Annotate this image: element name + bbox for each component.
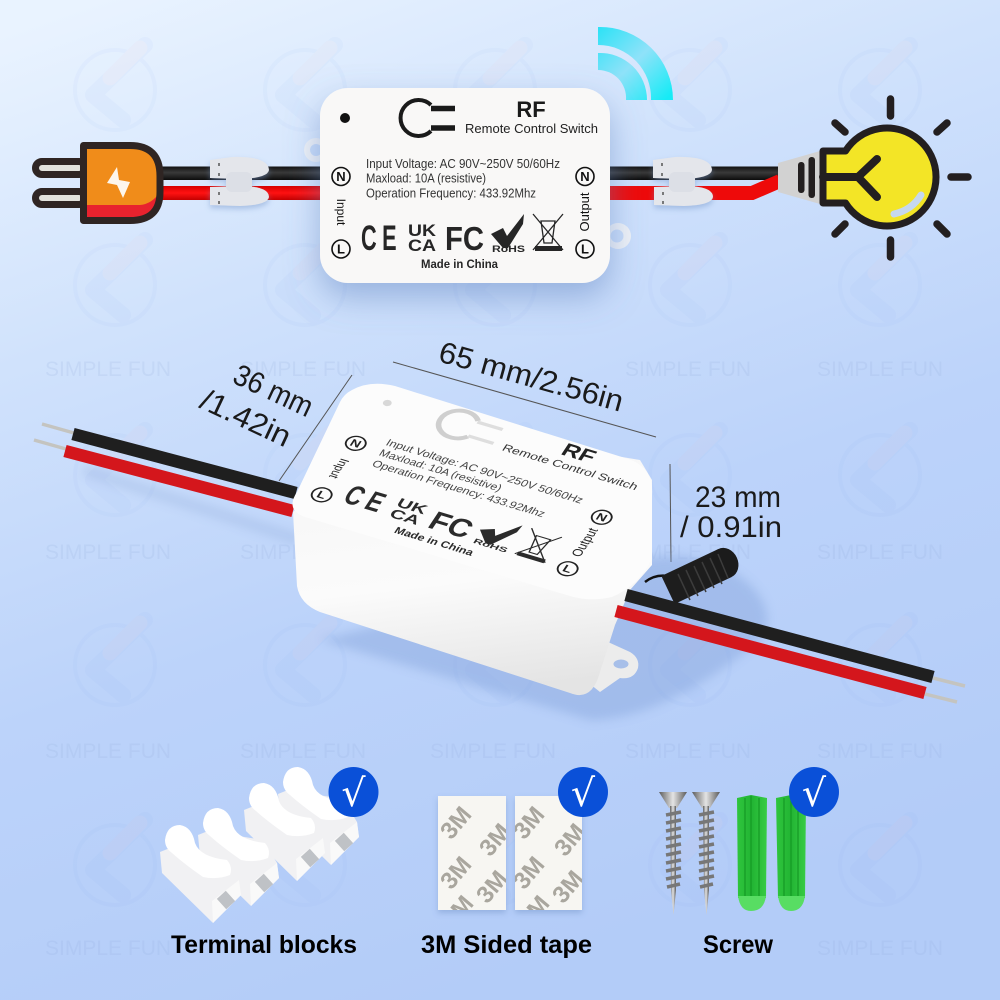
block 3 <box>244 783 325 881</box>
watermark pattern: SIMPLE FUN <box>817 937 943 960</box>
watermark pattern: SIMPLE FUN <box>240 358 366 381</box>
certification marks <box>361 214 563 271</box>
caption: screw: Screw <box>703 931 774 959</box>
block 1 <box>160 825 241 923</box>
dimension line: depth <box>279 375 352 481</box>
green wall anchor 2 <box>776 795 806 911</box>
watermark pattern: SIMPLE FUN <box>45 740 171 763</box>
specifications: Operation Frequency: 433.92Mhz <box>366 186 536 200</box>
specifications: Input Voltage: AC 90V~250V 50/60Hz <box>366 157 560 171</box>
specifications: Maxload: 10A (resistive) <box>366 172 486 186</box>
mounting lugs <box>304 138 631 249</box>
dimension label: 23 mm: / 0.91in <box>680 511 782 544</box>
check badge: screws: √ <box>802 771 827 815</box>
dimension label: 36 mm: /1.42in <box>195 383 296 454</box>
subheading: Remote Control Switch <box>500 442 641 493</box>
watermark pattern: SIMPLE FUN <box>45 358 171 381</box>
tape strip 1: 3M <box>474 819 516 862</box>
terminal marks: L <box>581 242 589 256</box>
terminal marks <box>308 434 615 578</box>
output wires <box>616 595 965 702</box>
icon: plug <box>36 146 160 220</box>
specifications: Operation Frequency: 433.92Mhz <box>370 458 548 520</box>
tape strip 2: 3M <box>508 852 550 895</box>
terminal marks: L <box>314 489 329 502</box>
certification marks: FC <box>423 506 480 544</box>
terminal marks: Input <box>325 457 351 480</box>
left dimension wires <box>34 424 300 540</box>
dimension label: 36 mm: 36 mm <box>228 358 318 424</box>
watermark pattern: SIMPLE FUN <box>817 358 943 381</box>
accessory: terminal blocks <box>160 767 359 923</box>
certification marks <box>331 476 562 578</box>
caption: terminal blocks: Terminal blocks <box>171 931 357 959</box>
terminal marks: N <box>336 169 346 184</box>
caption: tape: 3M Sided tape <box>421 931 592 959</box>
tape strip 2: 3M <box>508 802 550 845</box>
block 4 <box>278 767 359 865</box>
tape strip 2: 3M <box>513 891 555 934</box>
watermark pattern: SIMPLE FUN <box>45 937 171 960</box>
terminal marks: Output <box>577 192 592 232</box>
specifications: Input Voltage: AC 90V~250V 50/60Hz <box>383 437 586 506</box>
printed label <box>302 384 653 588</box>
certification marks: CE <box>361 220 397 258</box>
tape strip 1: 3M <box>435 852 477 895</box>
certification marks: CA <box>386 507 423 528</box>
heading: RF: RF <box>516 97 546 122</box>
watermark pattern: SIMPLE FUN <box>817 740 943 763</box>
tape strip 1: 3M <box>435 802 477 845</box>
heading: RF: RF <box>557 439 601 467</box>
specifications <box>366 157 560 200</box>
certification marks: UK <box>408 222 436 240</box>
antenna coil <box>645 543 743 600</box>
watermark pattern: SIMPLE FUN <box>45 541 171 564</box>
front and side faces <box>293 420 652 695</box>
dimension line: width <box>393 362 656 437</box>
tape strip 2 <box>513 796 584 915</box>
certification marks: UK <box>393 496 431 518</box>
3D switch module <box>292 384 965 720</box>
check badge: terminal blocks <box>328 767 378 817</box>
screw 2 <box>692 792 720 915</box>
accessory: 3M tape <box>436 796 584 915</box>
watermark pattern: SIMPLE FUN <box>240 740 366 763</box>
certification marks: Made in China <box>392 526 476 558</box>
module body <box>320 88 610 283</box>
dimension label: 65 mm: 65 mm/2.56in <box>435 336 627 419</box>
check badge: terminal blocks: √ <box>341 771 366 815</box>
wiring diagram <box>36 27 968 283</box>
right wire connector <box>653 157 713 206</box>
mounting lug <box>585 642 638 692</box>
terminal marks: N <box>593 511 610 524</box>
dimension line: height <box>670 464 671 562</box>
terminal marks <box>332 168 594 258</box>
terminal marks: L <box>560 563 575 575</box>
output wires <box>606 166 780 193</box>
input wires <box>160 166 322 200</box>
tape strip 1 <box>436 796 508 915</box>
certification marks: Made in China <box>421 257 498 271</box>
certification marks: RoHS <box>472 537 510 554</box>
terminal marks: N <box>347 437 364 450</box>
watermark pattern: SIMPLE FUN <box>625 541 751 564</box>
specifications: Maxload: 10A (resistive) <box>377 447 505 494</box>
indicator dot <box>340 113 350 123</box>
certification marks: RoHS <box>492 244 525 254</box>
body shadow <box>320 556 767 720</box>
tape strip 2: 3M <box>547 866 589 909</box>
terminal marks: N <box>580 169 590 184</box>
watermark pattern: SIMPLE FUN <box>625 358 751 381</box>
check badge: screws <box>789 767 839 817</box>
top face <box>292 384 652 599</box>
dimension label: 23 mm: 23 mm <box>695 481 781 514</box>
screw 1 <box>659 792 687 915</box>
check badge: tape: √ <box>571 771 596 815</box>
icon: light bulb <box>778 99 968 257</box>
embossed logo <box>432 406 507 449</box>
dimension label: 36 mm <box>195 358 318 454</box>
watermark pattern: SIMPLE FUN <box>625 740 751 763</box>
brand logo <box>401 100 455 136</box>
terminal marks: Output <box>568 526 602 558</box>
left wire connector <box>210 157 269 206</box>
tape strip 1: 3M <box>471 866 513 909</box>
tape strip 2: 3M <box>549 819 591 862</box>
accessory: screws and anchors <box>659 792 806 915</box>
block 2 <box>198 808 279 906</box>
terminal marks: Input <box>334 199 348 226</box>
certification marks: FC <box>445 220 484 257</box>
subheading: Remote Control Switch <box>465 122 598 136</box>
check badge: tape <box>558 767 608 817</box>
watermark pattern: SIMPLE FUN <box>240 541 366 564</box>
watermark pattern: SIMPLE FUN <box>817 541 943 564</box>
green wall anchor 1 <box>737 795 767 911</box>
terminal marks: L <box>337 242 345 256</box>
indicator dot <box>381 399 393 407</box>
watermark pattern: SIMPLE FUN <box>430 740 556 763</box>
tape strip 1: 3M <box>437 891 479 934</box>
flat switch module <box>304 88 631 283</box>
certification marks: CA <box>408 237 436 255</box>
certification marks: CE <box>338 479 392 518</box>
dimension label: 23 mm <box>680 481 782 544</box>
icon: RF signal arcs <box>598 27 673 100</box>
